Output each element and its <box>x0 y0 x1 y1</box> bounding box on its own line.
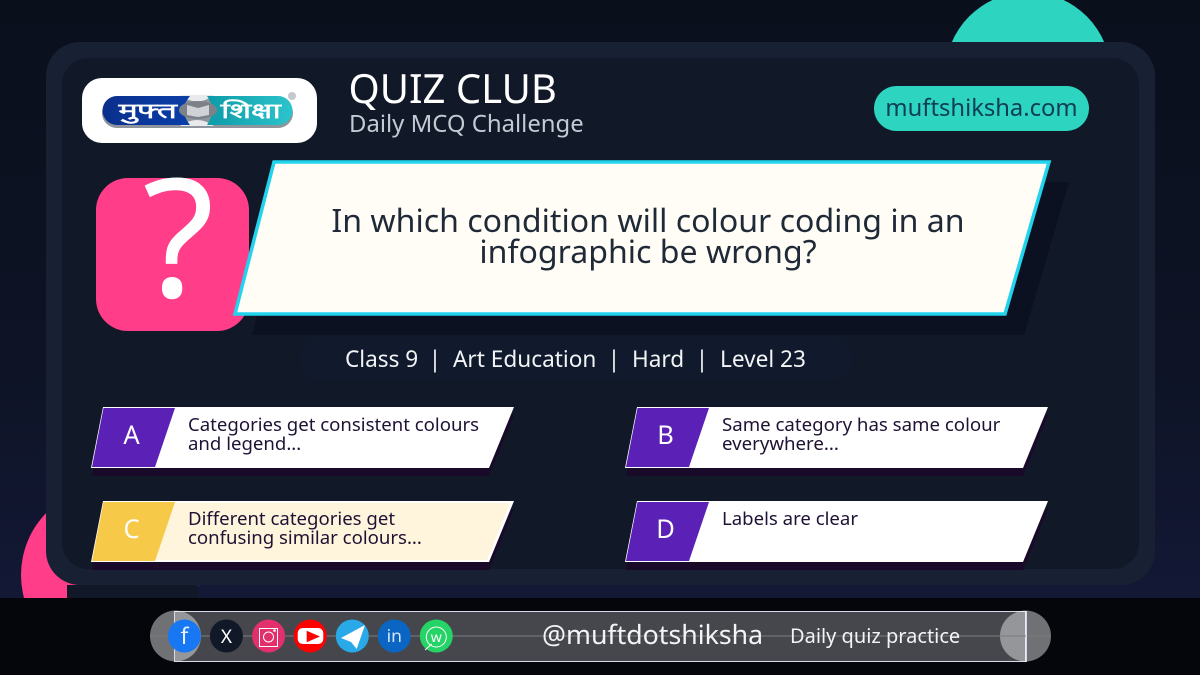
option C (correct): C <box>123 512 140 546</box>
question card <box>235 162 1069 335</box>
meta strip <box>300 336 852 380</box>
option C (correct) <box>91 501 514 570</box>
option B <box>625 407 1048 476</box>
option A: A <box>123 418 140 452</box>
meta strip: Art Education <box>453 343 596 374</box>
option D: D <box>656 512 675 546</box>
subtitle: Daily MCQ Challenge <box>349 107 584 140</box>
icon: whatsapp: w <box>431 628 442 647</box>
title: QUIZ CLUB <box>348 60 557 115</box>
decorative teal circle <box>945 0 1111 158</box>
icon: youtube <box>294 620 327 652</box>
icon: X: X <box>221 623 233 649</box>
social bar <box>150 610 1051 662</box>
meta strip: | <box>696 343 708 374</box>
logo: मुफ्त <box>117 97 179 129</box>
icon: whatsapp <box>420 620 453 652</box>
decorative pink circle <box>21 486 199 664</box>
option D <box>625 501 1048 570</box>
question card: infographic be wrong? <box>479 230 817 273</box>
handle: @muftdotshiksha <box>542 615 763 652</box>
footer band <box>0 598 1200 675</box>
option A <box>91 407 514 476</box>
question card: In which condition will colour coding in an <box>331 199 965 242</box>
option C (correct): confusing similar colours... <box>188 525 422 550</box>
option A: Categories get consistent colours <box>188 412 479 437</box>
website pill <box>874 86 1089 131</box>
tagline: Daily quiz practice <box>790 622 960 649</box>
question mark tile: ? <box>143 122 214 346</box>
option C (correct): Different categories get <box>188 506 395 531</box>
icon: X <box>210 620 243 652</box>
option A: and legend... <box>188 431 301 456</box>
icon: facebook: f <box>180 619 189 651</box>
icon: telegram <box>336 620 369 652</box>
meta strip: | <box>429 343 441 374</box>
meta strip: Class 9 <box>345 343 418 374</box>
logo <box>82 78 317 143</box>
meta strip: Level 23 <box>720 343 806 374</box>
meta strip: Hard <box>632 343 684 374</box>
icon: instagram <box>252 620 285 652</box>
icon: facebook <box>168 619 201 652</box>
meta strip: | <box>608 343 620 374</box>
logo: शिक्षा <box>219 97 282 129</box>
question mark tile <box>96 122 249 346</box>
website pill: muftshiksha.com <box>885 91 1078 123</box>
icon: linkedin <box>378 620 411 652</box>
option B: B <box>657 418 674 452</box>
option B: Same category has same colour <box>722 412 1001 437</box>
option D: Labels are clear <box>722 506 858 531</box>
icon: linkedin: in <box>387 624 402 648</box>
main panel <box>46 42 1155 598</box>
option B: everywhere... <box>722 431 839 456</box>
